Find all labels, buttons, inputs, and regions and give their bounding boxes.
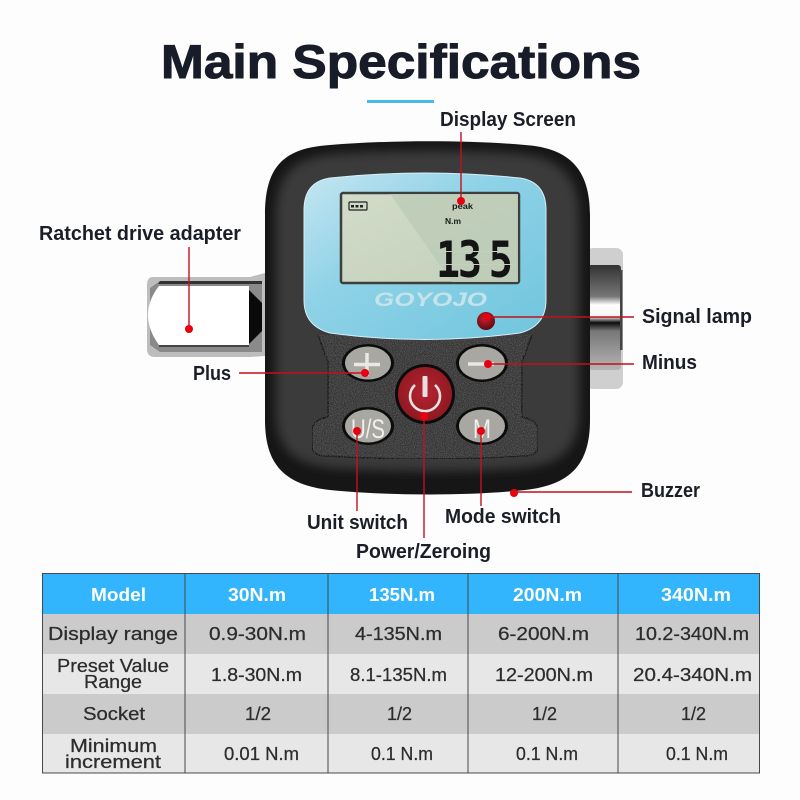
table header row: 30N.m [228, 584, 286, 605]
callouts [39, 109, 752, 563]
title: Main Specifications [161, 35, 641, 88]
callout: power / zeroing: Power/Zeroing [356, 541, 491, 563]
callout: plus: Plus [193, 363, 231, 385]
row: minimum increment: 0.01 N.m [224, 743, 299, 764]
callout: ratchet drive adapter [39, 223, 241, 333]
row: preset value range: 1.8-30N.m [211, 664, 302, 685]
row: display range: 10.2-340N.m [635, 623, 749, 644]
housing body shading [276, 151, 579, 471]
callout: unit switch: Unit switch [307, 512, 408, 534]
row: socket [42, 694, 760, 734]
row: preset value range: Preset Value [57, 655, 169, 676]
M button [456, 407, 508, 445]
housing body [265, 141, 590, 494]
callout: display screen [440, 109, 576, 205]
callout: buzzer: Buzzer [641, 480, 700, 502]
title underline accent [367, 100, 434, 103]
row: minimum increment: 0.1 N.m [371, 743, 433, 764]
row: minimum increment: 0.1 N.m [666, 743, 728, 764]
table header row: 340N.m [661, 584, 731, 605]
callout: display screen: Display Screen [440, 109, 576, 131]
row: preset value range: 20.4-340N.m [633, 664, 752, 685]
row: display range: 0.9-30N.m [209, 623, 306, 644]
table header row: Model [91, 584, 146, 605]
row: socket: 1/2 [387, 703, 412, 724]
table header row: 135N.m [369, 584, 435, 605]
callout: plus [193, 363, 369, 385]
callout: mode switch: Mode switch [445, 506, 561, 528]
U/S button [342, 407, 394, 445]
row: socket: 1/2 [245, 703, 271, 724]
row: socket: 1/2 [532, 703, 557, 724]
row: preset value range [42, 654, 760, 694]
callout: ratchet drive adapter: Ratchet drive adapter [39, 223, 241, 245]
LCD screen [341, 193, 519, 289]
lower control panel outline [312, 335, 538, 459]
callout: minus: Minus [642, 352, 697, 374]
plus button [342, 344, 394, 382]
battery icon [349, 202, 367, 210]
torque adapter device [147, 141, 623, 494]
callout: unit switch [307, 427, 408, 534]
row: display range: 4-135N.m [355, 623, 442, 644]
M button: M [473, 414, 491, 444]
U/S button: U/S [351, 414, 385, 444]
row: socket: 1/2 [681, 703, 706, 724]
row: display range [42, 614, 760, 654]
peak label: peak [452, 201, 473, 211]
table header row [42, 574, 760, 614]
callout: minus [484, 352, 697, 374]
unit label: N.m [445, 216, 461, 226]
minus button [456, 344, 508, 382]
power button [395, 364, 455, 424]
callout: signal lamp [484, 306, 752, 328]
rear socket ring [586, 248, 623, 389]
row: socket: Socket [83, 703, 145, 724]
row: display range: 6-200N.m [498, 623, 589, 644]
row: preset value range: 8.1-135N.m [350, 664, 447, 685]
callout: power / zeroing [356, 412, 491, 563]
LCD reading: 135 [436, 231, 513, 289]
signal lamp [477, 312, 495, 330]
ratchet drive adapter square [147, 273, 265, 357]
row: preset value range: 12-200N.m [495, 664, 593, 685]
row: minimum increment: 0.1 N.m [516, 743, 578, 764]
blue display panel [304, 173, 546, 340]
table header row: 200N.m [513, 584, 582, 605]
callout: mode switch [445, 427, 561, 528]
callout: signal lamp: Signal lamp [642, 306, 752, 328]
row: preset value range: Range [84, 671, 142, 692]
callout: buzzer [510, 480, 700, 502]
row: minimum increment: increment [65, 751, 161, 772]
GOYOJO logo: GOYOJO [374, 289, 487, 311]
row: minimum increment: Minimum [70, 735, 157, 756]
row: display range: Display range [48, 623, 178, 644]
specification table [42, 574, 760, 773]
row: minimum increment [42, 734, 760, 773]
